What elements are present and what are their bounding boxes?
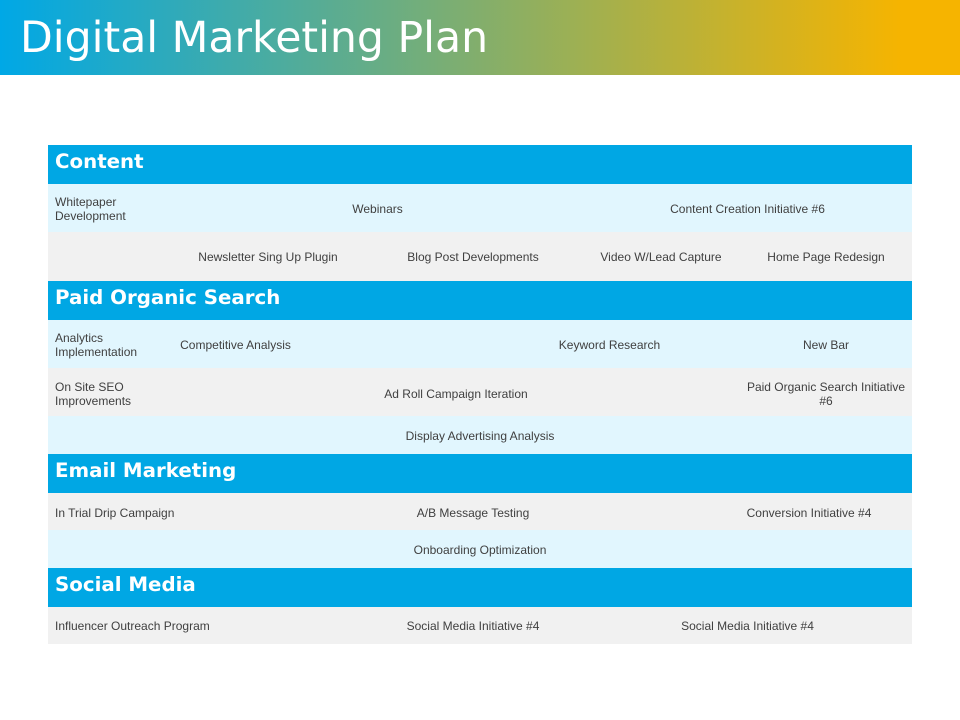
item: A/B Message Testing [417,506,529,520]
item [55,331,137,359]
heading: Content [48,145,912,184]
heading: Social Media: Social Media [55,573,196,596]
heading: Paid Organic Search [48,281,912,320]
item: Influencer Outreach Program [55,619,210,633]
item: Onboarding Optimization [414,543,546,557]
item: On Site SEO [55,380,124,394]
title banner [0,0,960,75]
item: Display Advertising Analysis [406,429,554,443]
item: Webinars [352,202,403,216]
item: Development [55,208,126,222]
item: New Bar [803,338,849,352]
row: social 1 [48,607,912,644]
item: Social Media Initiative #4 [407,619,539,633]
row: email 2 [48,530,912,568]
heading: Social Media [48,568,912,607]
item: Keyword Research [559,338,660,352]
item: Social Media Initiative #4 [681,619,814,633]
item: Home Page Redesign [767,250,885,264]
item: Newsletter Sing Up Plugin [198,250,338,264]
row: search 3 [48,416,912,454]
item: Paid Organic Search Initiative [747,380,905,394]
heading: Email Marketing [48,454,912,493]
item: Improvements [55,394,131,408]
heading: Email Marketing: Email Marketing [55,459,236,482]
item [55,194,126,222]
item [55,380,131,408]
heading: Content: Content [55,150,144,173]
item [747,380,905,408]
item: Video W/Lead Capture [600,250,722,264]
heading: Paid Organic Search: Paid Organic Search [55,286,280,309]
row: email 1 [48,493,912,530]
row: content 1 [48,184,912,232]
item: Ad Roll Campaign Iteration [384,387,528,401]
item: #6 [819,394,833,408]
row: search 2 [48,368,912,416]
row: search 1 [48,320,912,368]
item: Analytics [55,331,103,345]
item: Conversion Initiative #4 [747,506,871,520]
item: Implementation [55,345,137,359]
row: content 2 [48,232,912,281]
item: Content Creation Initiative #6 [670,202,825,216]
item: Whitepaper [55,194,116,208]
title: Digital Marketing Plan [20,13,488,63]
item: Competitive Analysis [180,338,291,352]
item: Blog Post Developments [407,250,539,264]
item: In Trial Drip Campaign [55,506,174,520]
